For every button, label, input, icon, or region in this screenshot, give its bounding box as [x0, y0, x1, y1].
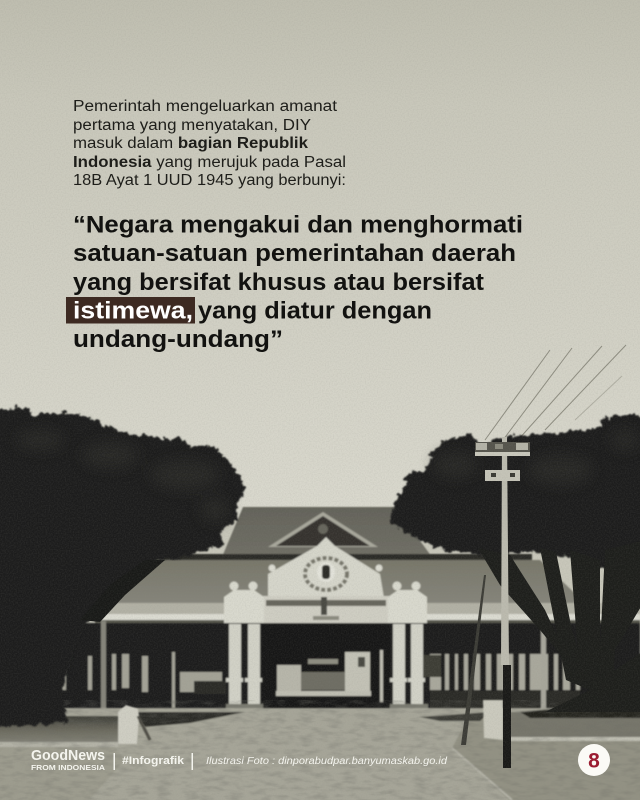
left courtyard windows: [42, 652, 222, 708]
upper roof: [222, 507, 432, 557]
main pole dark base: [503, 665, 511, 768]
quote text block: yang bersifat khusus atau bersifat: [73, 269, 484, 296]
logo: GoodNews from Indonesia: FROM INDONESIA: [31, 763, 106, 772]
photo: telegraph wires: [485, 345, 626, 440]
lower roof: [106, 560, 585, 603]
gate piers and finials: [224, 582, 427, 623]
left tree canopy: [0, 406, 246, 726]
right tree trunks: [478, 540, 640, 712]
ground texture: [0, 708, 640, 800]
right tree foliage highlights: [433, 430, 639, 485]
thin dark pole: [461, 575, 486, 745]
quote text block: satuan-satuan pemerintahan daerah: [73, 240, 516, 267]
intro text block: [73, 98, 346, 189]
intro text block: Pemerintah mengeluarkan amanat: [73, 98, 338, 115]
left curb: [0, 742, 118, 747]
quote text block: undang-undang”: [73, 326, 283, 353]
page number badge: [578, 744, 610, 776]
right building post: [541, 622, 546, 712]
quote text block: yang diatur dengan: [198, 298, 432, 324]
photo: stone posts: [118, 700, 503, 744]
intro text block: 18B Ayat 1 UUD 1945 yang berbunyi:: [73, 172, 346, 189]
right curb: [510, 737, 640, 741]
photo: right tree: [389, 415, 640, 712]
left courtyard railing: [194, 681, 226, 694]
main pole light part: [501, 437, 509, 665]
left lawn: [0, 716, 130, 745]
tree shadow left: [128, 712, 245, 727]
tree shadow far right: [520, 700, 640, 718]
footer bar: [31, 747, 447, 772]
right stone post: [483, 700, 503, 740]
logo: GoodNews from Indonesia: [31, 747, 106, 772]
page number badge: 8: [588, 750, 600, 772]
left lower ground: [0, 747, 125, 800]
intro text block: Indonesia yang merujuk pada Pasal: [73, 154, 346, 171]
photo credit: Ilustrasi Foto : dinporabudpar.banyumaskab.go.id: [206, 756, 447, 767]
entablature: [95, 603, 640, 623]
logo: GoodNews from Indonesia: GoodNews: [31, 747, 105, 764]
right tree canopy: [389, 415, 640, 610]
hashtag: Infografik: #Infografik: [122, 755, 185, 767]
road surface: [0, 708, 640, 800]
left tree branch: [80, 560, 165, 622]
left stone post: [118, 705, 150, 744]
left building post: [101, 621, 106, 709]
right lawn strip: [510, 712, 640, 737]
highlight: istimewa: istimewa,: [73, 298, 193, 324]
left tree foliage highlights: [16, 430, 229, 522]
intro text block: pertama yang menyatakan, DIY: [73, 117, 311, 134]
gate columns: [226, 624, 428, 711]
gate pediment: [268, 537, 384, 598]
photo: left tree: [0, 406, 246, 726]
ground: [0, 700, 640, 800]
intro text block: masuk dalam bagian Republik: [73, 135, 308, 152]
dark colonnade: [38, 623, 640, 711]
background sky: [0, 0, 640, 520]
tree shadow right: [420, 712, 490, 721]
upper gable: [268, 512, 378, 547]
road edge kerb: [452, 748, 512, 800]
lower crossarm: [485, 470, 520, 481]
roof eave: [112, 554, 532, 560]
gate beam with ornament: [262, 596, 390, 623]
right courtyard fence: [423, 640, 585, 708]
gate inner opening: [262, 622, 390, 710]
right lawn: [452, 708, 640, 800]
upper crossarm: [475, 442, 530, 456]
quote text block: [66, 212, 523, 353]
photo: keraton building: [38, 507, 640, 712]
quote text block: “Negara mengakui dan menghormati: [73, 212, 523, 238]
photo: telegraph poles: [461, 437, 530, 768]
